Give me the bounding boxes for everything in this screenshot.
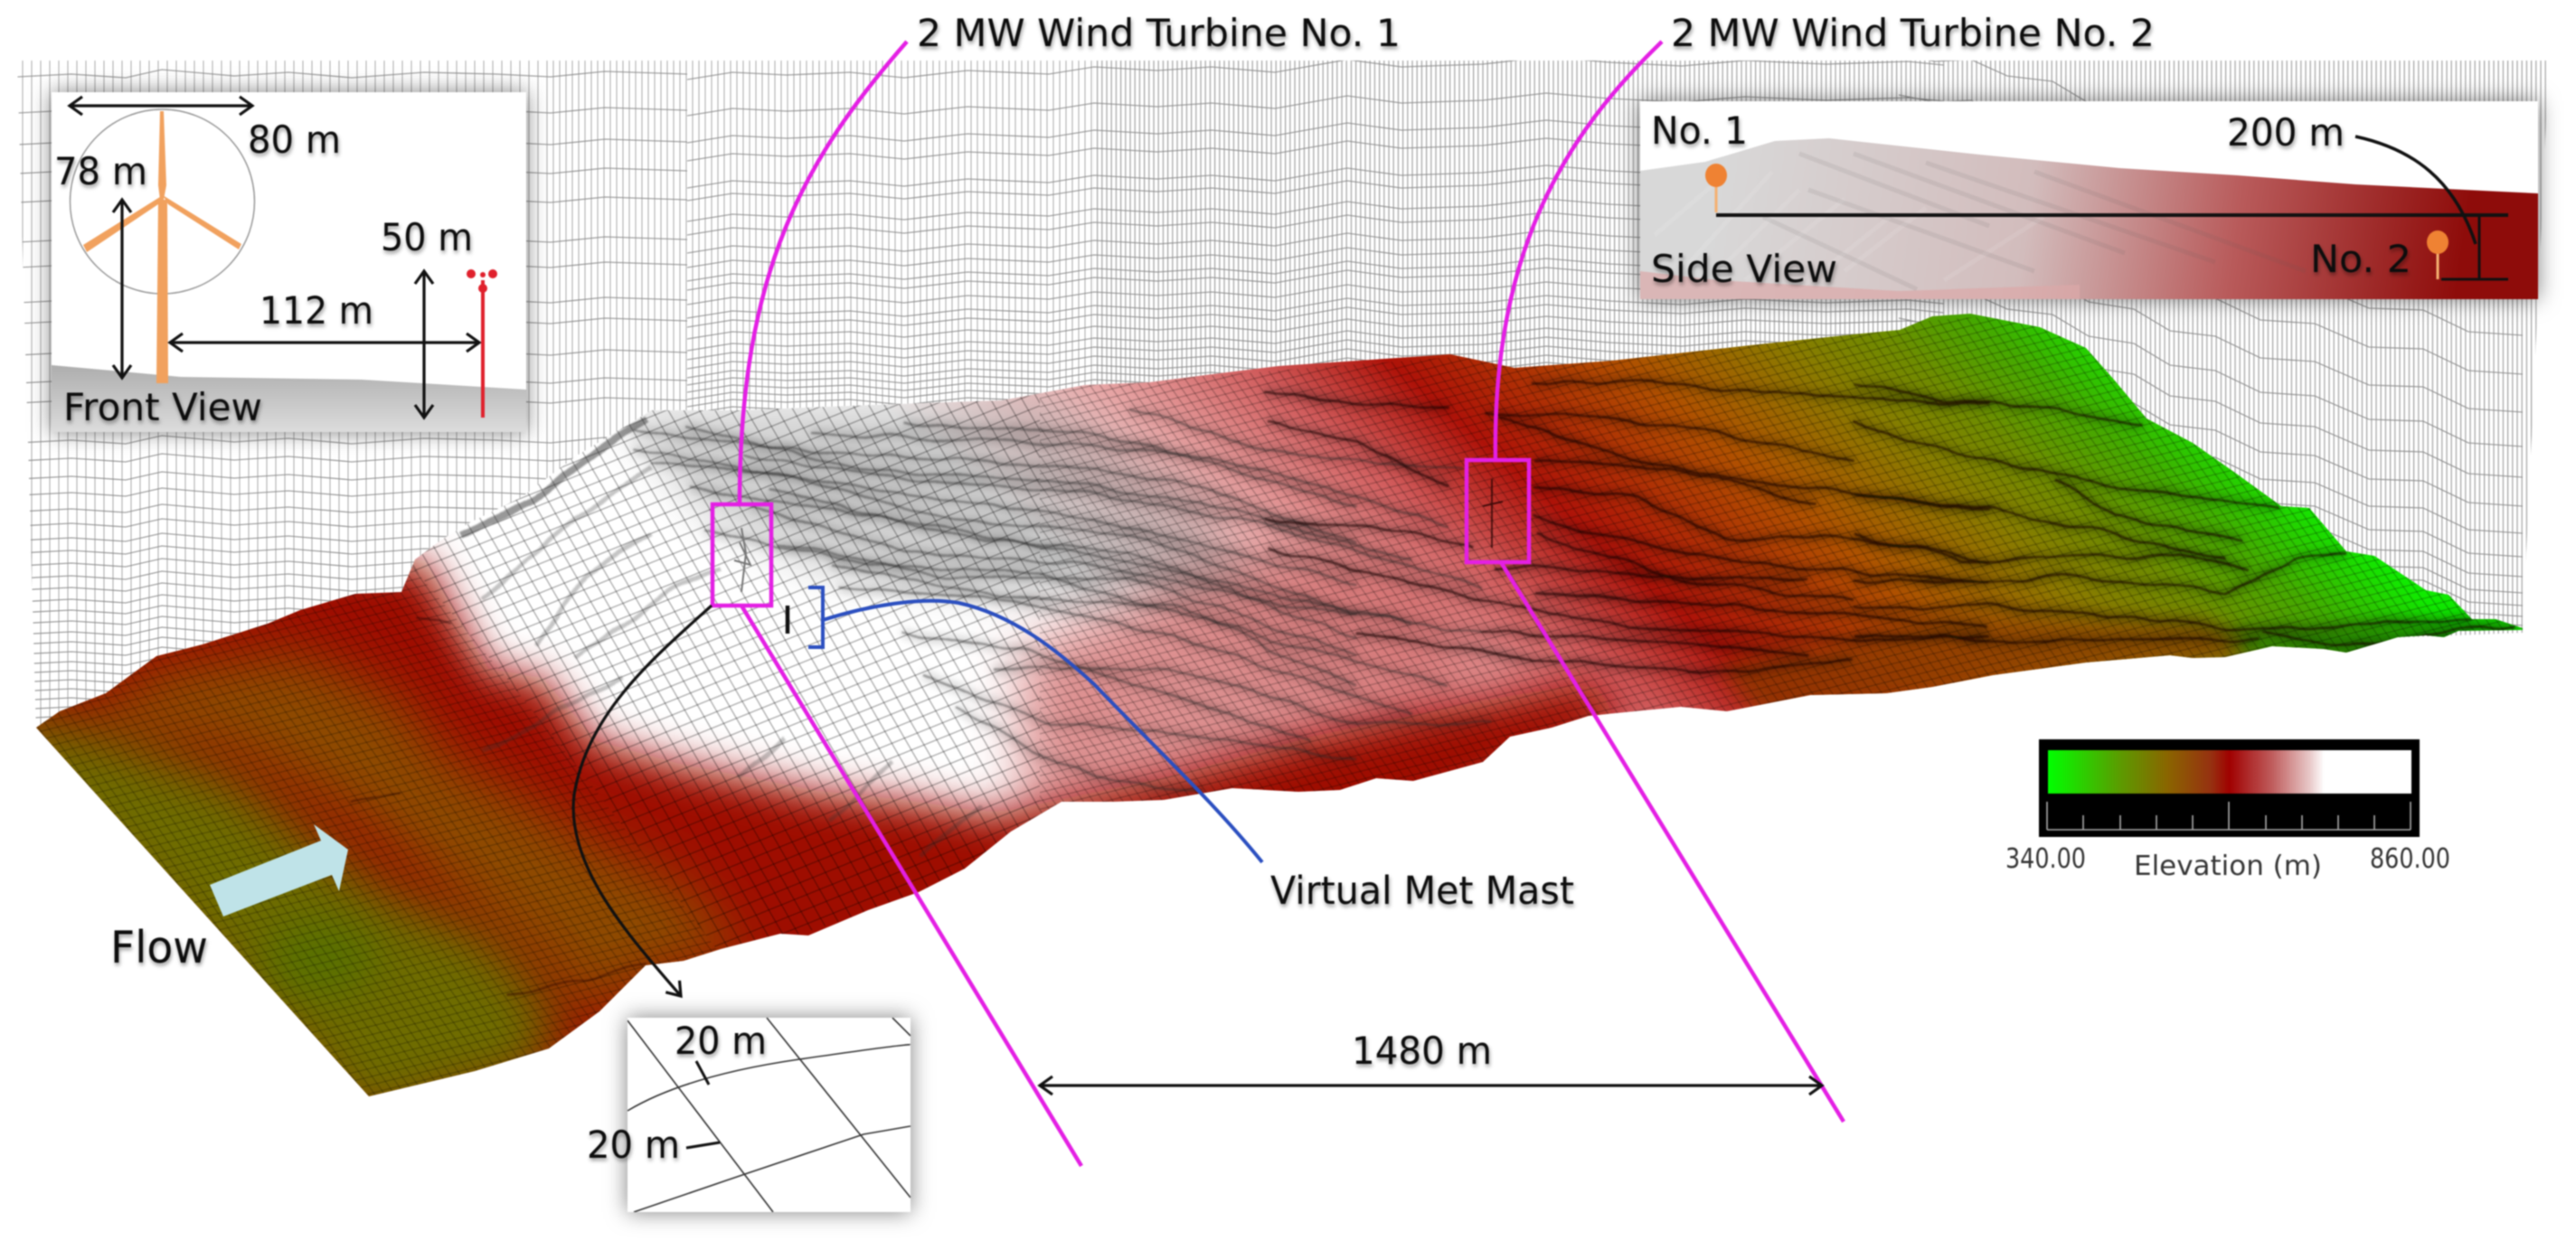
side view labels: 200 m	[2227, 110, 2345, 155]
legend gradient	[2048, 750, 2411, 794]
arrow: 1480 m spacing	[1040, 1084, 1822, 1087]
olive flat inflow region	[0, 705, 561, 1130]
panel: side view	[1640, 101, 2538, 299]
title: wind turbine 2: 2 MW Wind Turbine No. 2	[1671, 11, 2155, 55]
side view lower left pink	[1640, 271, 2080, 299]
side view labels: Side View	[1651, 247, 1837, 291]
arrow: rotor diameter	[70, 104, 252, 108]
label: 1480 m: 1480 m	[1352, 1029, 1492, 1073]
virtual met mast marker	[786, 606, 789, 634]
soft ridge shadows dark	[1266, 381, 2514, 673]
pin: turbine 1	[1705, 164, 1727, 212]
turbine 2 mesh silhouette	[1483, 479, 1503, 548]
front view labels	[54, 117, 473, 429]
inset mesh lines	[627, 1018, 911, 1212]
fine mesh on right slope	[1040, 316, 2516, 810]
title: wind turbine 1: 2 MW Wind Turbine No. 1	[917, 11, 1401, 55]
dark green lower band	[2242, 624, 2523, 660]
fine mesh crossing on right slope	[1040, 316, 2523, 813]
side view terrain	[1640, 138, 2538, 299]
panel: front view	[52, 92, 526, 432]
200 m leader curve	[2355, 136, 2476, 244]
flow arrow	[210, 824, 348, 916]
front view labels: Front View	[63, 385, 262, 429]
inset ticks	[686, 1061, 720, 1148]
met mast	[467, 269, 497, 418]
pink wash on central lower slope	[1022, 542, 1465, 813]
terrain colour base	[409, 313, 2524, 730]
side view labels	[1651, 108, 2411, 291]
side view ridge texture	[1655, 154, 2306, 289]
label: virtual met mast: Virtual Met Mast	[1270, 869, 1574, 914]
front view labels: 112 m	[259, 288, 373, 333]
front view labels: 50 m	[381, 215, 473, 259]
blue bracket and leader	[808, 587, 1262, 862]
arrow: hub height	[120, 200, 124, 378]
rotor circle	[71, 109, 255, 294]
side view baseline	[1716, 213, 2508, 217]
front view labels: 80 m	[248, 117, 341, 162]
grey ridges	[633, 407, 1492, 791]
legend labels: 340.00	[2005, 843, 2086, 875]
side view labels: No. 1	[1651, 108, 1748, 153]
hill mesh coarse	[407, 389, 1040, 958]
faint hill gullies	[485, 470, 984, 855]
dark ridges	[1266, 381, 2514, 673]
legend labels: Elevation (m)	[2134, 851, 2322, 882]
inset labels: 20 m	[587, 1123, 680, 1167]
grey shading of ridged band	[615, 398, 1248, 597]
pin: turbine 2	[2427, 230, 2449, 279]
label: flow: Flow	[110, 922, 208, 973]
arrow: turbine to mast distance	[170, 341, 479, 344]
200 m bracket	[2441, 215, 2508, 279]
legend labels	[2005, 843, 2450, 882]
small creases on the flat	[351, 619, 646, 995]
dense hill crest	[461, 417, 646, 533]
terrain surface	[35, 313, 2524, 1097]
fine mesh on inflow flat	[40, 569, 716, 1095]
red zone around hills and lower edge	[36, 540, 1638, 1097]
legend frame	[2039, 739, 2420, 837]
inset labels: 20 m	[675, 1019, 767, 1063]
callout: turbine 1 magenta	[712, 42, 1081, 1166]
legend ticks	[2047, 802, 2411, 830]
inset labels	[587, 1019, 767, 1167]
fine mesh crossing on inflow flat	[37, 567, 712, 1095]
side view background	[1640, 101, 2538, 299]
green tint on flat	[267, 922, 375, 994]
legend labels: 860.00	[2370, 843, 2450, 875]
front view labels: 78 m	[54, 149, 147, 193]
inset background	[627, 1018, 911, 1212]
front view ground	[52, 365, 526, 432]
black zoom leader curve	[573, 606, 712, 996]
brown lower band on right	[1718, 619, 2260, 723]
soft ridge shadows grey	[633, 407, 1492, 791]
brown slope	[63, 651, 750, 1021]
panel: mesh zoom inset	[587, 1018, 911, 1212]
legend: elevation colour bar	[2005, 739, 2450, 882]
turbine 1 mesh silhouette	[734, 528, 750, 592]
wall mesh	[17, 54, 2558, 747]
callout: turbine 2 magenta	[1467, 42, 1844, 1122]
arrow: mast height	[422, 271, 426, 418]
side view labels: No. 2	[2310, 237, 2411, 281]
hill mesh coarse crossing	[407, 389, 1040, 958]
turbine tower and blades	[83, 111, 241, 383]
front view background	[52, 92, 526, 432]
